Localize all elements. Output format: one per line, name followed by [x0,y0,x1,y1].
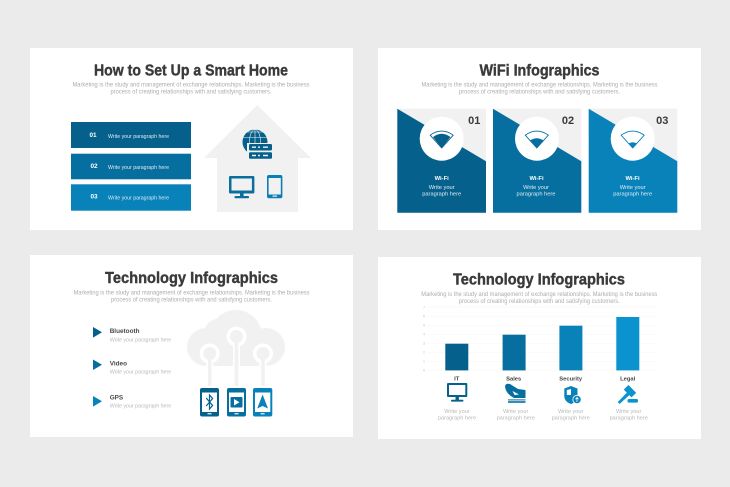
column: Sales: paragraph here [497,416,535,422]
card 03 [589,109,677,213]
bar: Legal [616,317,639,370]
icon: hand with card [505,384,526,403]
step bar 01: 01 [89,132,97,139]
list item: GPS: Write your paragraph here [110,404,171,410]
panel: smart home [30,48,353,230]
column: Legal [610,376,648,422]
card 01: Write your [429,185,455,191]
icon: monitor [447,383,467,402]
card 01: Wi-Fi [435,176,449,182]
icon: tablet phone [267,175,282,198]
cloud illustration [187,310,285,386]
column: Legal: Write your [616,409,642,415]
text block: bar chart technology intro: Marketing is the study and management of exchange relationships. Marketing is the business [421,291,658,298]
card 03: 03 [656,115,668,127]
icon: phone video [227,388,246,416]
bar: Security [559,326,582,370]
column: IT: paragraph here [438,416,476,422]
text block: wifi intro [422,81,658,96]
list item: Bluetooth: Bluetooth [110,328,140,335]
icon: wifi signal high [430,131,453,148]
card 01: 01 [468,115,480,127]
panel: wifi [378,48,701,230]
list item: Video [93,360,171,376]
card 03: paragraph here [613,191,652,197]
card 03: Wi-Fi [625,176,640,182]
house illustration [204,105,311,212]
y axis labels: 0 [423,369,425,373]
icon: phone navigation [253,388,272,416]
panel: cloud technology [30,255,353,437]
icon: wifi signal low [621,131,644,148]
icon: gavel [618,385,638,404]
y axis labels [423,305,425,373]
column: IT: Write your [444,409,470,415]
card 02: Write your [523,185,549,191]
step bar 03: Write your paragraph here [108,196,169,202]
card 02: paragraph here [517,191,555,197]
step bar 01 [71,122,191,148]
y axis labels: 5 [423,324,425,328]
bar: Sales [503,335,526,370]
card 01: paragraph here [422,191,461,197]
text block: bar chart technology intro: process of creating relationships with and satisfying customers. [459,298,620,305]
column: Legal: Legal [620,376,636,382]
bar: IT [445,344,468,370]
column: Sales [497,376,535,422]
step bar 02: Write your paragraph here [108,165,169,171]
y axis labels: 4 [423,332,425,336]
text block: bar chart technology intro [421,291,658,305]
column: Security: paragraph here [552,416,590,422]
list item: GPS: GPS [110,394,124,401]
y axis labels: 6 [423,314,425,318]
card 01 [397,109,486,213]
list item: Bluetooth [93,327,171,344]
icon: phone bluetooth [200,388,219,416]
column: Security: Security [559,376,583,382]
panel: bar chart technology [378,257,701,439]
icon: globe with server [242,130,272,159]
card 02 [493,109,581,213]
step bar 01: Write your paragraph here [108,134,169,140]
list item: Bluetooth: Write your paragraph here [110,338,171,344]
list item: Video: Video [110,360,127,367]
card 03: Write your [620,185,646,191]
card 02: Wi-Fi [529,176,544,182]
y axis labels: 1 [423,360,425,364]
text block: smart home intro: Marketing is the study and management of exchange relationships. Marketing is the business [72,81,310,88]
step bar 02 [71,154,191,179]
icon: wifi signal medium [525,131,548,148]
icon: shield with lock [564,386,581,404]
text block: smart home intro [72,81,310,96]
heading: bar chart technology: Technology Infographics [453,272,625,288]
column: Sales: Write your [503,409,529,415]
text block: wifi intro: Marketing is the study and management of exchange relationships. Marketing is the business [422,81,658,88]
card 02: 02 [562,115,574,127]
icon: monitor [229,176,254,198]
step bar 03 [71,184,191,211]
heading: wifi: WiFi Infographics [480,62,600,80]
y axis labels: 7 [423,305,425,309]
list item: GPS [93,394,171,410]
list item: Video: Write your paragraph here [110,370,171,376]
heading: cloud technology: Technology Infographics [105,270,278,287]
text block: cloud technology intro: process of creating relationships with and satisfying customers. [111,297,272,304]
step bar 02: 02 [90,163,98,170]
y axis labels: 2 [423,351,425,355]
bar chart [423,305,656,373]
text block: smart home intro: process of creating relationships with and satisfying customers. [110,89,272,96]
step bar 03: 03 [90,194,98,200]
column: IT [438,376,476,422]
text block: cloud technology intro: Marketing is the study and management of exchange relationships. Marketing is the business [74,289,310,296]
column: Sales: Sales [506,376,521,382]
column: Legal: paragraph here [610,416,648,422]
column: Security: Write your [558,409,584,415]
text block: wifi intro: process of creating relationships with and satisfying customers. [459,89,620,96]
text block: cloud technology intro [74,289,310,304]
heading: smart home: How to Set Up a Smart Home [94,62,288,80]
column: Security [552,376,590,422]
column: IT: IT [454,376,460,382]
y axis labels: 3 [423,342,425,346]
